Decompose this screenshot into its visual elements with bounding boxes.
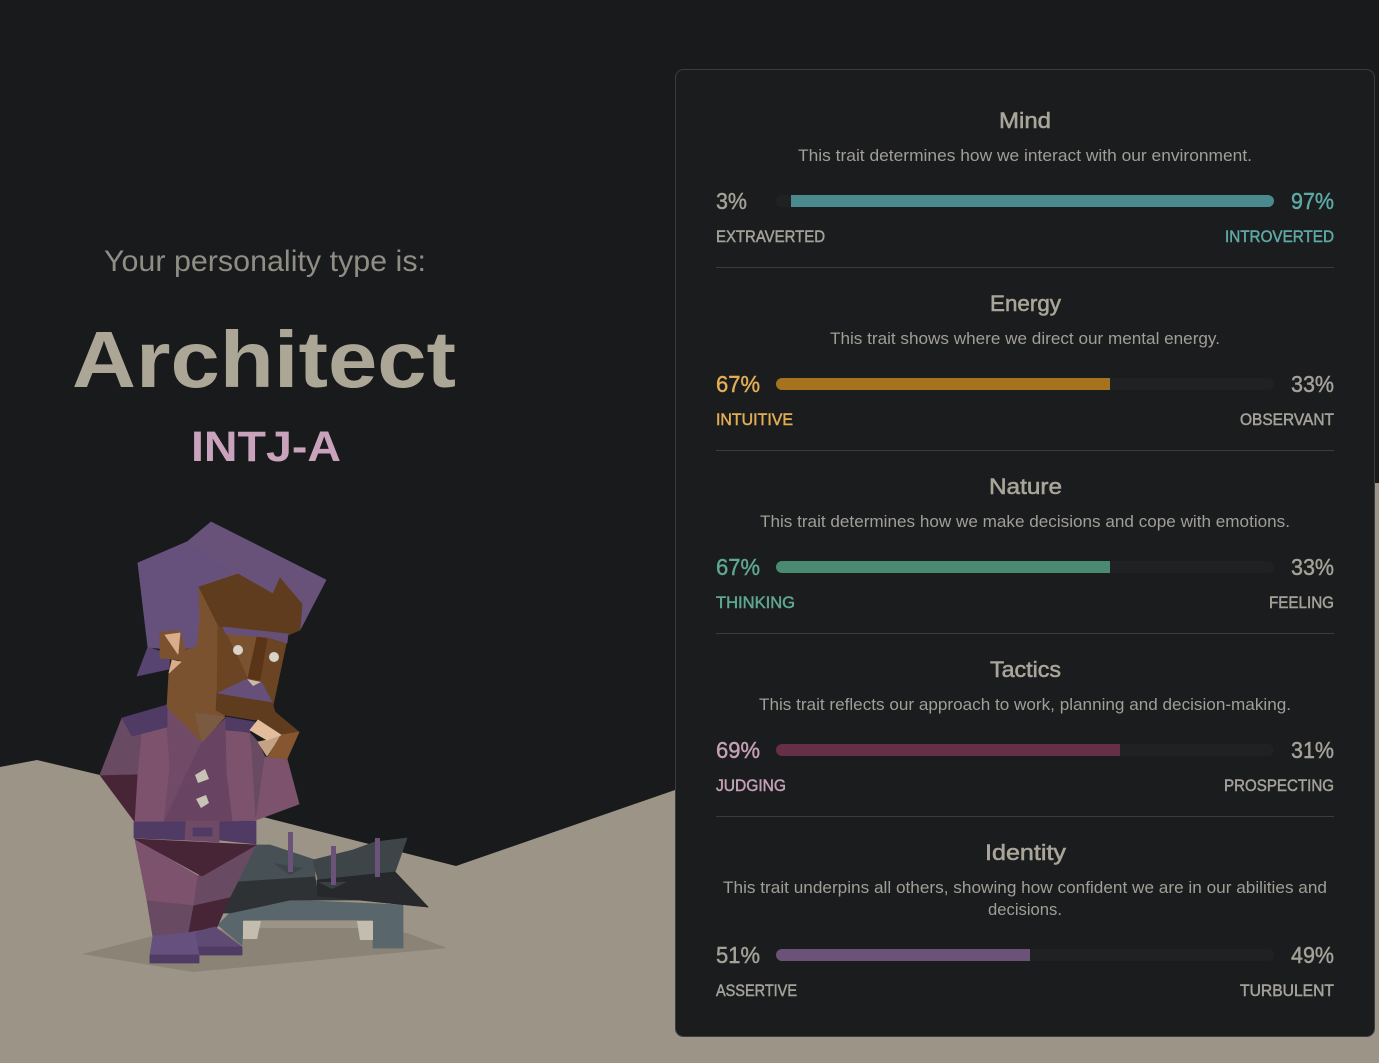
- trait: Tactics: This trait reflects our approach to work, planning and decision-making.: [759, 695, 1291, 714]
- trait: Tactics: PROSPECTING: [1224, 776, 1334, 795]
- trait: Nature: 33%: [1291, 554, 1334, 580]
- ground: [0, 483, 1379, 1063]
- trait: Mind: EXTRAVERTED: [716, 227, 825, 246]
- head and face: [160, 574, 302, 742]
- trait: Energy: Energy: [990, 291, 1061, 316]
- table model: [218, 832, 428, 948]
- trait: Identity: Identity: [985, 840, 1066, 865]
- trait: Identity: ASSERTIVE: [716, 981, 797, 1000]
- trait: Identity: decisions.: [988, 900, 1062, 919]
- trait: Identity: 51%: [716, 942, 760, 968]
- trait: Nature: This trait determines how we make decisions and cope with emotions.: [760, 512, 1290, 531]
- title: Architect: Architect: [72, 315, 456, 404]
- panel: personality traits: [676, 70, 1374, 1036]
- trait: Energy: OBSERVANT: [1240, 410, 1334, 429]
- trait: Tactics: JUDGING: [716, 776, 786, 795]
- trait: Mind: 3%: [716, 188, 747, 214]
- heading: your personality type is: Your personality type is:: [104, 245, 426, 278]
- subtitle: INTJ-A: INTJ-A: [191, 423, 341, 471]
- hand on chin: [250, 712, 299, 759]
- trait: Mind: 97%: [1291, 188, 1334, 214]
- trait: Nature: Nature: [989, 474, 1062, 499]
- trait: Nature: FEELING: [1269, 593, 1334, 612]
- trait: Identity: TURBULENT: [1240, 981, 1334, 1000]
- trait: Tactics: 31%: [1291, 737, 1334, 763]
- trait: Identity: [716, 840, 1334, 1000]
- illustration: architect character with model: [82, 522, 447, 972]
- torso and arms: [100, 705, 299, 822]
- trait: Mind: Mind: [999, 108, 1051, 133]
- legs and shoes: [135, 839, 256, 963]
- trait: Mind: [716, 108, 1334, 268]
- trait: Nature: [716, 474, 1334, 634]
- trait: Tactics: Tactics: [990, 657, 1061, 682]
- trait: Tactics: 69%: [716, 737, 760, 763]
- trait: Identity: This trait underpins all others, showing how confident we are in our abilities and: [723, 878, 1327, 897]
- trait: Mind: INTROVERTED: [1225, 227, 1334, 246]
- trait: Energy: 33%: [1291, 371, 1334, 397]
- ground shadow: [82, 928, 447, 972]
- trait: Tactics: [716, 657, 1334, 817]
- trait: Mind: This trait determines how we interact with our environment.: [798, 146, 1252, 165]
- trait: Energy: This trait shows where we direct our mental energy.: [830, 329, 1220, 348]
- trait: Energy: INTUITIVE: [716, 410, 793, 429]
- trait: Identity: 49%: [1291, 942, 1334, 968]
- trait: Energy: 67%: [716, 371, 760, 397]
- belt: [134, 821, 256, 844]
- trait: Nature: THINKING: [716, 593, 795, 612]
- hair: [137, 522, 326, 676]
- trait: Nature: 67%: [716, 554, 760, 580]
- trait: Energy: [716, 291, 1334, 451]
